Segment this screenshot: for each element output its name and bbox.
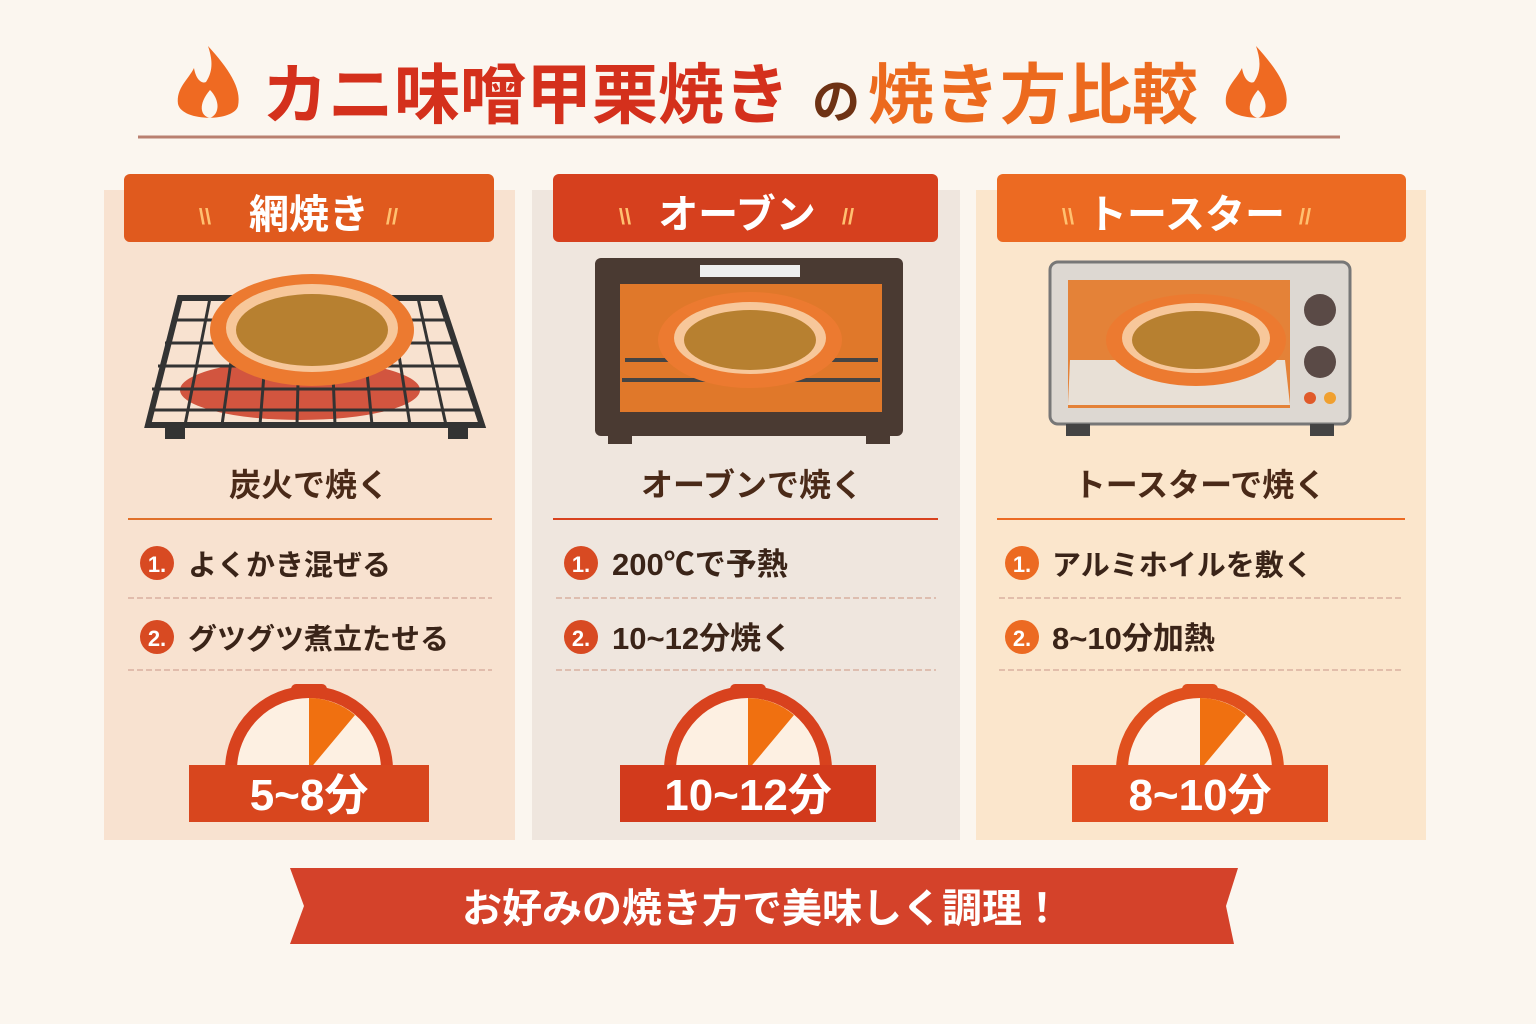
- step 2: 2.: [1013, 626, 1031, 651]
- header tab: \\: [1062, 204, 1074, 229]
- subheading: 炭火で焼く: [229, 467, 389, 503]
- step 2: 2.: [572, 626, 590, 651]
- title: カニ味噌甲栗焼き: [262, 58, 790, 132]
- title: [178, 46, 1287, 132]
- header tab: [997, 174, 1406, 242]
- timer: [620, 684, 876, 822]
- icon: flame right: [1226, 46, 1287, 118]
- panel: オーブン: [532, 174, 960, 840]
- bottom banner: [290, 868, 1238, 944]
- step 2: 8~10分加熱: [1052, 621, 1215, 656]
- subheading: トースターで焼く: [1074, 467, 1326, 503]
- bottom banner: お好みの焼き方で美味しく調理！: [462, 887, 1062, 931]
- subheading: オーブンで焼く: [641, 467, 863, 503]
- step 1: 200℃で予熱: [612, 547, 788, 582]
- icon: flame left: [178, 46, 239, 118]
- timer: [189, 684, 429, 822]
- header tab: トースター: [1087, 193, 1285, 237]
- step 2: 10~12分焼く: [612, 621, 792, 656]
- title: 焼き方比較: [868, 58, 1198, 132]
- step 1: 1.: [1013, 552, 1031, 577]
- panel: 網焼き: [104, 174, 515, 840]
- timer: 8~10分: [1128, 771, 1272, 820]
- header tab: 網焼き: [249, 193, 369, 237]
- illustration: grill: [148, 274, 482, 439]
- illustration: toaster: [1050, 262, 1350, 436]
- timer: [1072, 684, 1328, 822]
- header tab: \\: [199, 204, 211, 229]
- title: の: [812, 76, 860, 129]
- timer: 5~8分: [250, 771, 368, 820]
- step 1: 1.: [572, 552, 590, 577]
- step 1: 1.: [148, 552, 166, 577]
- step 2: グツグツ煮立たせる: [188, 623, 449, 656]
- timer: 10~12分: [664, 771, 832, 820]
- header tab: [553, 174, 938, 242]
- header tab: //: [842, 204, 854, 229]
- step 1: アルミホイルを敷く: [1052, 549, 1313, 582]
- step 1: よくかき混ぜる: [188, 549, 391, 582]
- panel: トースター: [976, 174, 1426, 840]
- header tab: //: [1299, 204, 1311, 229]
- illustration: oven: [595, 258, 903, 444]
- header tab: [124, 174, 494, 242]
- header tab: \\: [619, 204, 631, 229]
- header tab: //: [386, 204, 398, 229]
- header tab: オーブン: [658, 193, 816, 237]
- step 2: 2.: [148, 626, 166, 651]
